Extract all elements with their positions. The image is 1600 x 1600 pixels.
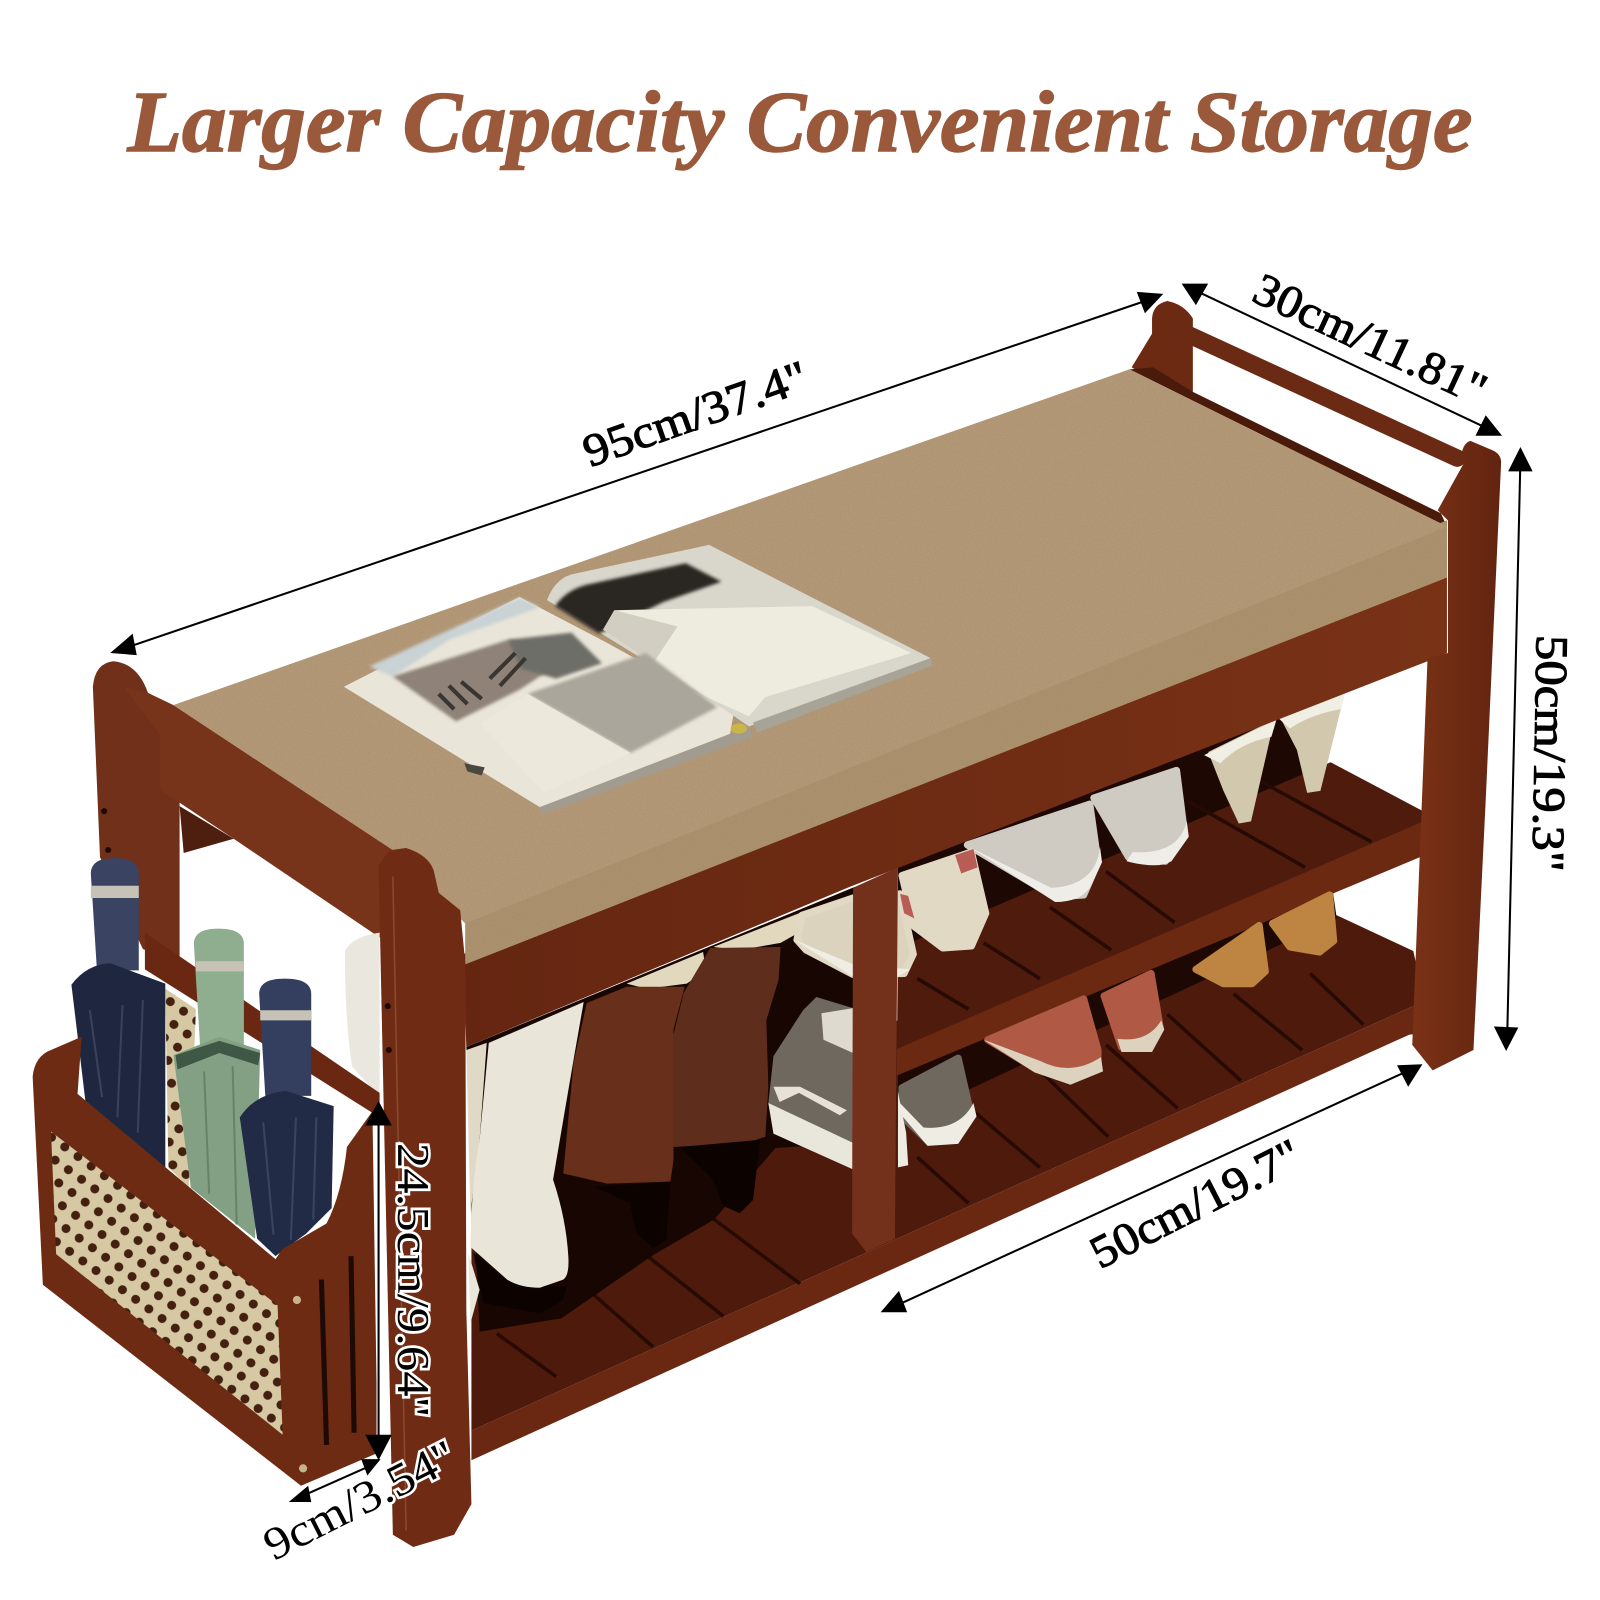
leg highlights and holes xyxy=(101,808,406,1531)
cushion top xyxy=(173,369,1447,923)
holder back wall xyxy=(145,933,380,1117)
heel pair xyxy=(1204,693,1345,823)
back rattan xyxy=(165,989,196,1188)
magazine xyxy=(344,545,933,814)
lower shelf xyxy=(471,915,1427,1460)
side rail xyxy=(123,687,393,944)
dimension: width 95cm: 95cm/37.4" xyxy=(576,350,814,477)
front right leg xyxy=(1412,441,1501,1070)
dimension: height 50cm: 50cm/19.3" xyxy=(1523,635,1578,872)
shoes on lower shelf xyxy=(345,895,1334,1323)
dimension: holder depth 9cm: 9cm/3.54" xyxy=(255,1430,464,1570)
white flats xyxy=(967,770,1189,902)
cushion front xyxy=(465,520,1447,964)
front rattan panel xyxy=(51,1132,283,1435)
back right post and handle xyxy=(1130,301,1457,527)
dimension: width 95cm xyxy=(110,292,1163,655)
bench xyxy=(93,301,1501,1547)
dimension: lower section 50cm: 50cm/19.7" xyxy=(1081,1129,1309,1278)
dimension: depth 30cm: 30cm/11.81" xyxy=(1246,263,1495,415)
green umbrella xyxy=(173,929,260,1239)
shoes on upper shelf xyxy=(794,693,1345,977)
screws xyxy=(293,1296,307,1472)
middle divider post xyxy=(852,867,898,1252)
upper shelf xyxy=(897,762,1435,1076)
dimension: depth 30cm xyxy=(1182,263,1502,436)
dimension: height 50cm xyxy=(1494,447,1578,1051)
grey sneakers xyxy=(768,997,977,1169)
dimension: holder height 24.5cm: 24.5cm/9.64" xyxy=(388,1143,439,1417)
umbrella holder xyxy=(33,858,380,1486)
boots xyxy=(345,913,799,1323)
dimension: lower section 50cm xyxy=(881,1064,1422,1312)
front apron xyxy=(463,571,1447,1047)
side slots xyxy=(321,1256,354,1445)
back left post xyxy=(93,661,180,964)
tan shoes xyxy=(1196,895,1334,984)
title: Larger Capacity Convenient Storage xyxy=(127,74,1472,170)
under-rail dark piece xyxy=(180,806,234,853)
red shoes xyxy=(984,973,1164,1085)
dark shadow behind left compartment xyxy=(466,887,855,1332)
navy umbrella one xyxy=(71,858,165,1167)
dark shadow behind right compartment xyxy=(898,709,1337,1122)
holder front frame xyxy=(33,1037,378,1486)
navy umbrella two xyxy=(240,979,334,1256)
dimension: holder height 24.5cm xyxy=(365,1101,439,1460)
front left leg xyxy=(379,848,471,1547)
cream slip-ons xyxy=(794,849,986,977)
